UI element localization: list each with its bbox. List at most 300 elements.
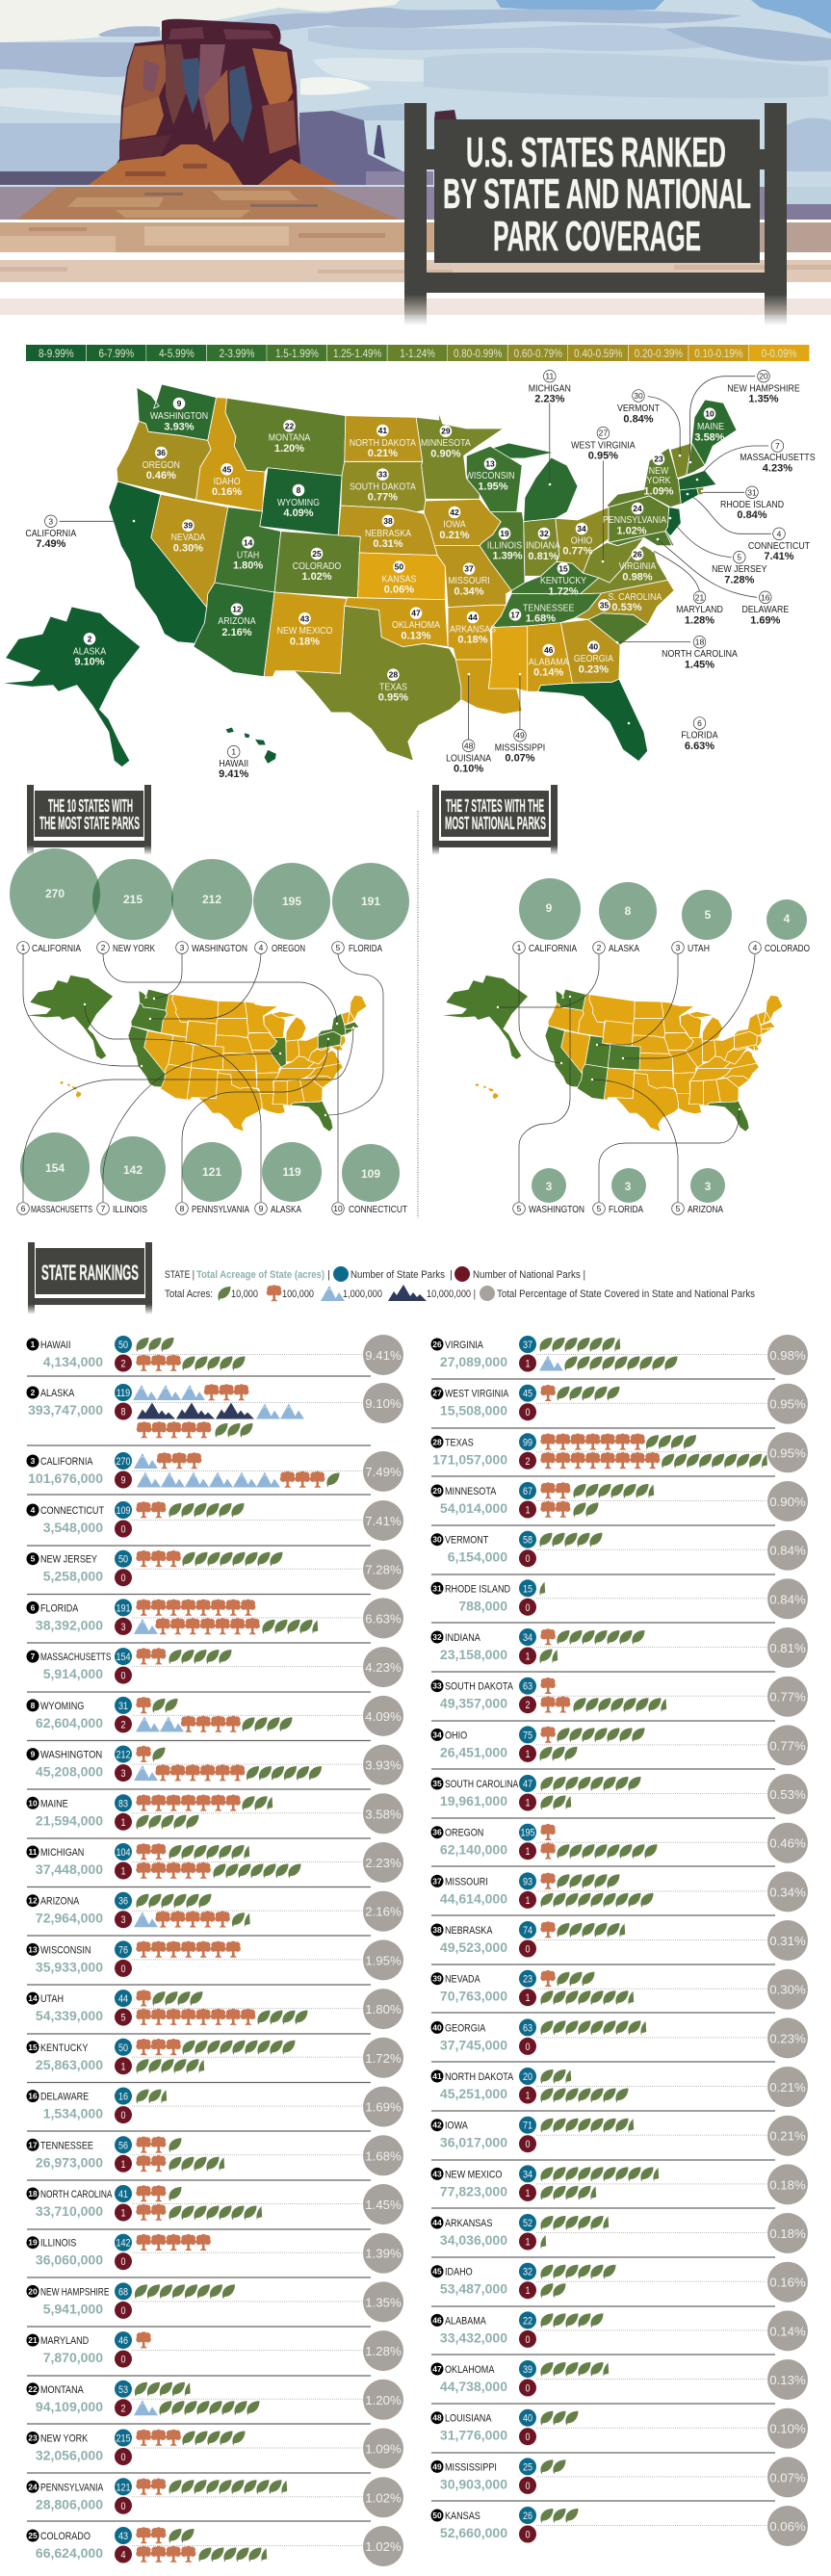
map labels inside states: 14 xyxy=(244,537,253,547)
row 30: Vermont: 58 xyxy=(523,1535,532,1547)
map labels inside states: 1.80% xyxy=(233,560,263,572)
row 19: Illinois: 0 xyxy=(120,2256,126,2268)
map labels inside states: 29 xyxy=(441,427,451,436)
row 42: Iowa: 71 xyxy=(523,2121,532,2132)
row 23: New York: 23 xyxy=(28,2433,38,2442)
row 24: Pennsylvania: 28,806,000 xyxy=(36,2496,103,2511)
map labels inside states: 3.93% xyxy=(164,421,195,432)
rankings key: 10,000 xyxy=(231,1288,258,1300)
map labels outside states: 4.23% xyxy=(763,463,792,475)
row 29: Minnesota: 1 xyxy=(525,1505,531,1517)
row 22: Montana: 22 xyxy=(28,2384,38,2394)
row 17: Tennessee: 17 xyxy=(28,2140,38,2149)
map labels inside states: 0.95% xyxy=(378,691,408,703)
row 40: Georgia xyxy=(431,2017,808,2058)
map labels inside states: NEVADA xyxy=(171,532,206,543)
rankings key: | xyxy=(450,1269,453,1281)
state park rank labels: OREGON xyxy=(272,943,305,954)
sign: the 7 states with the most national parks: THE 7 STATES WITH THE xyxy=(446,796,544,816)
map labels inside states: 44 xyxy=(468,612,478,622)
state park rank labels: 10 xyxy=(333,1204,343,1213)
legend: coverage colour scale: 0.60-0.79% xyxy=(514,348,562,360)
map labels outside states: 49 xyxy=(515,731,525,741)
row 9: Washington: 9 xyxy=(31,1750,36,1759)
row 44: Arkansas: 34,036,000 xyxy=(440,2232,507,2248)
legend: coverage colour scale: 1.25-1.49% xyxy=(333,348,381,360)
row 11: Michigan: 1 xyxy=(120,1866,126,1878)
row 39: Nevada xyxy=(431,1969,808,2010)
row 42: Iowa: 0.21% xyxy=(769,2129,806,2144)
row 49: Mississippi: 25 xyxy=(523,2462,532,2474)
row 27: West Virginia xyxy=(431,1384,808,1424)
row 39: Nevada: 23 xyxy=(523,1974,532,1986)
row 17: Tennessee: 1 xyxy=(120,2159,126,2171)
national park rank labels: COLORADO xyxy=(765,943,810,954)
row 16: Delaware: 16 xyxy=(28,2092,38,2101)
row 43: New Mexico: 34 xyxy=(523,2170,532,2181)
row 47: Oklahoma: 39 xyxy=(523,2364,532,2376)
row 32: Indiana: 34 xyxy=(523,1632,532,1644)
map labels inside states: 0.30% xyxy=(173,542,203,554)
row 2: Alaska: 9.10% xyxy=(365,1396,402,1411)
row 12: Arizona: 72,964,000 xyxy=(36,1911,103,1926)
map labels inside states: 36 xyxy=(157,448,166,457)
row 13: Wisconsin: WISCONSIN xyxy=(40,1945,91,1957)
row 34: Ohio: 75 xyxy=(523,1730,532,1742)
row 20: New Hampshire: NEW HAMPSHIRE xyxy=(40,2286,110,2299)
state park values: 191 xyxy=(361,895,380,908)
map labels inside states: 0.81% xyxy=(528,551,558,562)
row 45: Idaho: 0.16% xyxy=(769,2276,806,2290)
rankings key: STATE | xyxy=(165,1269,195,1281)
row 18: North Carolina: 33,710,000 xyxy=(36,2203,103,2219)
row 45: Idaho xyxy=(431,2262,808,2303)
row 17: Tennessee: 56 xyxy=(118,2141,128,2152)
row 17: Tennessee: 26,973,000 xyxy=(36,2154,103,2170)
row 41: North Dakota: NORTH DAKOTA xyxy=(445,2071,513,2083)
row 34: Ohio: 0.77% xyxy=(769,1738,806,1753)
map labels inside states: 1.02% xyxy=(301,571,332,583)
row 3: California: 3 xyxy=(31,1456,36,1466)
row 49: Mississippi: 49 xyxy=(432,2461,442,2471)
map labels inside states: ARKANSAS xyxy=(450,624,496,636)
row 3: California: 9 xyxy=(120,1475,126,1487)
map labels inside states: ALABAMA xyxy=(529,657,569,668)
map labels outside states: NORTH CAROLINA xyxy=(662,648,738,660)
map labels outside states: MICHIGAN xyxy=(529,383,571,395)
state park rank labels: 1 xyxy=(21,943,26,952)
state park rank labels: 2 xyxy=(101,943,106,952)
map labels inside states: 0.18% xyxy=(290,636,320,647)
row 15: Kentucky: 15 xyxy=(28,2043,38,2052)
row 28: Texas: TEXAS xyxy=(445,1438,474,1449)
row 39: Nevada: NEVADA xyxy=(445,1974,480,1986)
row 30: Vermont: 0.84% xyxy=(769,1544,806,1558)
row 12: Arizona: ARIZONA xyxy=(40,1896,80,1908)
row 5: New Jersey: 0 xyxy=(120,1573,126,1584)
row 17: Tennessee: 1.68% xyxy=(365,2148,402,2163)
row 38: Nebraska: 74 xyxy=(523,1925,532,1937)
map labels inside states: 1.09% xyxy=(643,485,674,497)
row 7: Massachusetts: 4.23% xyxy=(365,1660,402,1675)
row 50: Kansas: 0.06% xyxy=(769,2519,806,2534)
row 37: Missouri: 37 xyxy=(432,1876,442,1886)
row 27: West Virginia: 0 xyxy=(525,1407,531,1418)
map labels inside states: 1.20% xyxy=(274,443,304,455)
national park rank labels: 5 xyxy=(597,1204,602,1213)
row 23: New York xyxy=(27,2429,403,2469)
legend: coverage colour scale: 0.80-0.99% xyxy=(454,348,503,360)
map labels inside states: OREGON xyxy=(143,459,180,471)
row 45: Idaho: 45 xyxy=(432,2267,442,2277)
row 40: Georgia: 0.23% xyxy=(769,2031,806,2045)
sign: the 10 states with the most state parks xyxy=(27,785,151,855)
row 15: Kentucky: 25,863,000 xyxy=(36,2057,103,2072)
row 47: Oklahoma: 0.13% xyxy=(769,2373,806,2387)
row 46: Alabama: 0.14% xyxy=(769,2324,806,2338)
row 37: Missouri: 44,614,000 xyxy=(440,1890,507,1906)
row 9: Washington xyxy=(27,1745,403,1785)
row 33: South Dakota: SOUTH DAKOTA xyxy=(445,1681,513,1693)
row 4: Connecticut: 7.41% xyxy=(365,1514,402,1528)
map labels inside states: 1.39% xyxy=(492,551,523,562)
map labels outside states: 1 xyxy=(231,747,236,757)
row 19: Illinois: 1.39% xyxy=(365,2247,402,2261)
map labels inside states: KANSAS xyxy=(382,574,417,585)
state park values: 195 xyxy=(282,895,301,908)
row 40: Georgia: GEORGIA xyxy=(445,2023,486,2035)
state park rank labels: CALIFORNIA xyxy=(32,943,81,954)
row 7: Massachusetts: 0 xyxy=(120,1671,126,1682)
row 33: South Dakota xyxy=(431,1677,808,1717)
map labels outside states: MASSACHUSETTS xyxy=(740,452,816,463)
national park values: 5 xyxy=(705,908,712,922)
map labels inside states: TEXAS xyxy=(379,682,407,693)
row 44: Arkansas: 44 xyxy=(432,2218,442,2227)
row 35: South Carolina xyxy=(431,1774,808,1814)
map labels inside states: S. CAROLINA xyxy=(608,591,662,603)
row 2: Alaska: 119 xyxy=(117,1388,131,1399)
row 9: Washington: 212 xyxy=(116,1750,131,1761)
row 20: New Hampshire: 1.35% xyxy=(365,2295,402,2309)
map labels inside states: 2.16% xyxy=(221,627,252,638)
row 8: Wyoming: WYOMING xyxy=(40,1701,84,1712)
row 49: Mississippi xyxy=(431,2457,808,2497)
row 45: Idaho: IDAHO xyxy=(445,2267,473,2278)
row 19: Illinois xyxy=(27,2233,403,2274)
map labels outside states: 18 xyxy=(695,637,704,647)
row 18: North Carolina: 18 xyxy=(28,2189,38,2199)
rankings key: Total Acreage of State (acres) xyxy=(196,1269,325,1281)
state park values: 142 xyxy=(123,1163,143,1177)
legend: coverage colour scale: 0.20-0.39% xyxy=(635,348,683,360)
map labels inside states: INDIANA xyxy=(526,540,560,552)
row 40: Georgia: 37,745,000 xyxy=(440,2037,507,2052)
national park values: 3 xyxy=(625,1180,632,1193)
row 4: Connecticut: 0 xyxy=(120,1524,126,1536)
row 21: Maryland: 7,870,000 xyxy=(43,2350,103,2365)
national park rank labels: WASHINGTON xyxy=(529,1204,584,1215)
row 3: California: 270 xyxy=(116,1456,131,1468)
map labels inside states: NEW xyxy=(649,465,669,477)
row 2: Alaska: 393,747,000 xyxy=(28,1402,103,1418)
map labels inside states: 0.23% xyxy=(579,664,609,675)
map labels inside states: 0.13% xyxy=(401,630,431,641)
map labels inside states: 47 xyxy=(411,609,421,618)
row 27: West Virginia: 15,508,000 xyxy=(440,1403,507,1418)
map labels inside states: 13 xyxy=(485,459,495,469)
row 12: Arizona: 2.16% xyxy=(365,1905,402,1919)
row 36: Oregon: 195 xyxy=(520,1828,535,1839)
state park values: 109 xyxy=(361,1167,380,1181)
row 8: Wyoming: 62,604,000 xyxy=(36,1715,103,1730)
map labels outside states: 1.45% xyxy=(685,659,714,670)
map labels outside states: 16 xyxy=(761,592,770,602)
row 29: Minnesota: MINNESOTA xyxy=(445,1486,496,1497)
row 28: Texas: 2 xyxy=(525,1456,531,1468)
row 43: New Mexico: 0.18% xyxy=(769,2177,806,2192)
row 34: Ohio xyxy=(431,1725,808,1765)
map: states with most national parks xyxy=(443,954,783,1202)
map labels inside states: 37 xyxy=(464,564,474,574)
map labels inside states: 0.53% xyxy=(611,602,642,613)
row 10: Maine: 21,594,000 xyxy=(36,1812,103,1828)
map labels inside states: 42 xyxy=(450,507,459,517)
map labels inside states: 28 xyxy=(389,670,398,680)
row 46: Alabama: 33,432,000 xyxy=(440,2329,507,2345)
map labels inside states: VIRGINIA xyxy=(619,560,657,572)
row 48: Louisiana: LOUISIANA xyxy=(445,2413,492,2425)
row 2: Alaska: 8 xyxy=(120,1407,126,1418)
state park values xyxy=(45,887,380,1181)
row 31: Rhode Island: 15 xyxy=(523,1584,532,1596)
row 25: Colorado: 66,624,000 xyxy=(36,2545,103,2561)
row 6: Florida xyxy=(27,1598,403,1638)
map labels inside states: GEORGIA xyxy=(574,653,613,664)
map labels inside states: 33 xyxy=(378,470,387,480)
row 11: Michigan: 37,448,000 xyxy=(36,1861,103,1877)
row 39: Nevada: 70,763,000 xyxy=(440,1989,507,2004)
map labels outside states: 3 xyxy=(48,516,53,526)
state park values: 270 xyxy=(45,887,65,900)
national park values: 8 xyxy=(625,904,632,918)
legend: coverage colour scale: 4-5.99% xyxy=(159,348,195,360)
row 41: North Dakota: 20 xyxy=(523,2071,532,2083)
national park values: 9 xyxy=(546,901,553,915)
national park rank labels: UTAH xyxy=(688,943,710,954)
map labels inside states: 9 xyxy=(177,399,182,408)
row 35: South Carolina: 35 xyxy=(432,1779,442,1788)
row 1: Hawaii: 50 xyxy=(118,1340,128,1351)
map labels outside states: 1.28% xyxy=(685,614,714,626)
row 23: New York: 0 xyxy=(120,2452,126,2463)
row 30: Vermont xyxy=(431,1530,808,1571)
row 8: Wyoming: 4.09% xyxy=(365,1709,402,1724)
map labels inside states: ILLINOIS xyxy=(487,540,523,552)
row 1: Hawaii: 9.41% xyxy=(365,1348,402,1363)
row 10: Maine: 10 xyxy=(28,1798,38,1808)
row 8: Wyoming: 31 xyxy=(118,1701,128,1712)
row 29: Minnesota: 29 xyxy=(432,1486,442,1496)
national park values xyxy=(546,901,791,1193)
row 43: New Mexico: 77,823,000 xyxy=(440,2183,507,2199)
row 11: Michigan: 11 xyxy=(29,1847,38,1857)
row 43: New Mexico: 43 xyxy=(432,2169,442,2178)
national park rank labels: FLORIDA xyxy=(609,1204,643,1215)
row 17: Tennessee: TENNESSEE xyxy=(40,2141,93,2152)
row 6: Florida: 6 xyxy=(31,1602,36,1612)
row 22: Montana xyxy=(27,2380,403,2420)
map: states with most state parks xyxy=(23,953,383,1202)
legend: coverage colour scale: 0-0.09% xyxy=(762,348,797,360)
row 16: Delaware: DELAWARE xyxy=(40,2092,89,2103)
row 26: Virginia xyxy=(431,1335,808,1375)
row 13: Wisconsin xyxy=(27,1939,403,1980)
row 1: Hawaii xyxy=(27,1335,403,1375)
row 35: South Carolina: SOUTH CAROLINA xyxy=(445,1779,519,1790)
row 10: Maine: 83 xyxy=(118,1799,128,1810)
row 5: New Jersey: 7.28% xyxy=(365,1563,402,1577)
map labels outside states: FLORIDA xyxy=(681,730,718,742)
map labels inside states: 0.46% xyxy=(146,470,176,481)
sign: main title xyxy=(404,103,787,325)
row 49: Mississippi: MISSISSIPPI xyxy=(445,2462,497,2474)
row 46: Alabama: 0 xyxy=(525,2334,531,2346)
map labels inside states: 26 xyxy=(633,550,642,559)
legend: coverage colour scale: 0.40-0.59% xyxy=(574,348,623,360)
row 23: New York: 215 xyxy=(116,2433,131,2445)
row 21: Maryland: 0 xyxy=(120,2355,126,2366)
row 50: Kansas: 52,660,000 xyxy=(440,2525,507,2540)
row 24: Pennsylvania: 121 xyxy=(116,2483,131,2494)
row 13: Wisconsin: 35,933,000 xyxy=(36,1959,103,1974)
map labels outside states: 9.41% xyxy=(219,768,249,780)
map labels outside states: 0.95% xyxy=(588,450,618,461)
row 28: Texas: 28 xyxy=(432,1437,442,1446)
row 5: New Jersey: 5 xyxy=(31,1554,36,1564)
map labels inside states: 0.06% xyxy=(384,585,414,596)
map labels inside states: 3.58% xyxy=(694,431,725,443)
map labels inside states: 43 xyxy=(300,613,309,623)
row 15: Kentucky: KENTUCKY xyxy=(40,2043,89,2054)
map labels inside states: OHIO xyxy=(571,535,593,547)
national park rank labels: CALIFORNIA xyxy=(529,943,577,954)
row 2: Alaska: 2 xyxy=(31,1388,36,1397)
row 44: Arkansas xyxy=(431,2213,808,2253)
row 22: Montana: 2 xyxy=(120,2404,126,2415)
row 25: Colorado: 25 xyxy=(28,2531,38,2540)
row 31: Rhode Island: 788,000 xyxy=(458,1598,507,1613)
row 13: Wisconsin: 1.95% xyxy=(365,1953,402,1967)
row 3: California: 101,676,000 xyxy=(28,1470,103,1486)
row 42: Iowa: 0 xyxy=(525,2139,531,2150)
sign: the 10 states with the most state parks: THE MOST STATE PARKS xyxy=(39,814,140,833)
row 15: Kentucky xyxy=(27,2038,403,2078)
row 29: Minnesota xyxy=(431,1481,808,1522)
sign: the 10 states with the most state parks: THE 10 STATES WITH xyxy=(48,796,133,816)
map labels inside states: 2 xyxy=(88,634,92,643)
row 50: Kansas: 26 xyxy=(523,2511,532,2522)
rankings key: Number of State Parks xyxy=(351,1269,445,1281)
state park rank labels: 6 xyxy=(21,1204,26,1213)
row 36: Oregon: OREGON xyxy=(445,1828,483,1839)
row 21: Maryland: 21 xyxy=(28,2335,38,2345)
national park values: 3 xyxy=(546,1180,553,1193)
row 27: West Virginia: 45 xyxy=(523,1389,532,1400)
row 12: Arizona: 36 xyxy=(118,1896,128,1908)
legend: coverage colour scale: 8-9.99% xyxy=(39,348,74,360)
map labels inside states: 0.18% xyxy=(457,635,488,646)
row 50: Kansas: 0 xyxy=(525,2530,531,2541)
map labels inside states: 0.98% xyxy=(622,571,653,583)
row 42: Iowa xyxy=(431,2116,808,2156)
row 49: Mississippi: 0.07% xyxy=(769,2470,806,2485)
map labels outside states: 30 xyxy=(634,391,643,401)
row 6: Florida: 191 xyxy=(116,1603,131,1615)
map labels inside states: 39 xyxy=(184,521,193,531)
rankings key: Number of National Parks | xyxy=(473,1269,585,1281)
row 5: New Jersey: NEW JERSEY xyxy=(40,1554,97,1566)
map labels inside states: 0.77% xyxy=(368,491,398,503)
row 43: New Mexico xyxy=(431,2164,808,2204)
state park values: 215 xyxy=(123,893,143,906)
row 27: West Virginia: WEST VIRGINIA xyxy=(445,1389,509,1400)
row 18: North Carolina: 41 xyxy=(118,2189,128,2200)
row 15: Kentucky: 50 xyxy=(118,2043,128,2054)
row 48: Louisiana: 31,776,000 xyxy=(440,2428,507,2443)
row 47: Oklahoma xyxy=(431,2359,808,2400)
row 37: Missouri xyxy=(431,1871,808,1912)
row 26: Virginia: 0.98% xyxy=(769,1348,806,1363)
row 12: Arizona: 3 xyxy=(120,1914,126,1926)
map labels outside states: HAWAII xyxy=(219,758,248,769)
state park rank labels xyxy=(17,942,407,1215)
row 44: Arkansas: ARKANSAS xyxy=(445,2218,493,2229)
row 7: Massachusetts xyxy=(27,1647,403,1687)
row 38: Nebraska: 38 xyxy=(432,1925,442,1935)
row 10: Maine: 1 xyxy=(120,1817,126,1829)
row 47: Oklahoma: 47 xyxy=(432,2364,442,2374)
row 9: Washington: 3 xyxy=(120,1768,126,1780)
state park values: 121 xyxy=(202,1165,221,1179)
row 4: Connecticut: 4 xyxy=(31,1505,36,1515)
row 45: Idaho: 32 xyxy=(523,2267,532,2278)
map labels inside states: 0.14% xyxy=(533,667,564,679)
map labels outside states: 48 xyxy=(464,741,474,750)
state park rank labels: 5 xyxy=(336,943,341,952)
national park rank labels xyxy=(513,942,810,1215)
row 42: Iowa: 42 xyxy=(432,2121,442,2130)
row 22: Montana: 94,109,000 xyxy=(36,2399,103,2414)
row 26: Virginia: 27,089,000 xyxy=(440,1354,507,1369)
row 23: New York: 1.09% xyxy=(365,2442,402,2456)
row 24: Pennsylvania: 1.02% xyxy=(365,2490,402,2505)
row 14: Utah: 44 xyxy=(118,1993,128,2005)
state park rank labels: NEW YORK xyxy=(113,943,155,954)
row 14: Utah: UTAH xyxy=(40,1993,64,2005)
map labels inside states: PENNSYLVANIA xyxy=(603,514,667,526)
leader lines for external map labels xyxy=(60,377,771,741)
row 31: Rhode Island: 0 xyxy=(525,1602,531,1614)
sign: the 7 states with the most national parks: MOST NATIONAL PARKS xyxy=(445,814,546,833)
map labels outside states: VERMONT xyxy=(617,403,660,414)
row 42: Iowa: 36,017,000 xyxy=(440,2135,507,2150)
row 14: Utah xyxy=(27,1989,403,2029)
row 2: Alaska xyxy=(27,1383,403,1438)
row 41: North Dakota: 1 xyxy=(525,2091,531,2102)
row 2: Alaska: ALASKA xyxy=(40,1388,75,1399)
row 41: North Dakota: 45,251,000 xyxy=(440,2086,507,2101)
